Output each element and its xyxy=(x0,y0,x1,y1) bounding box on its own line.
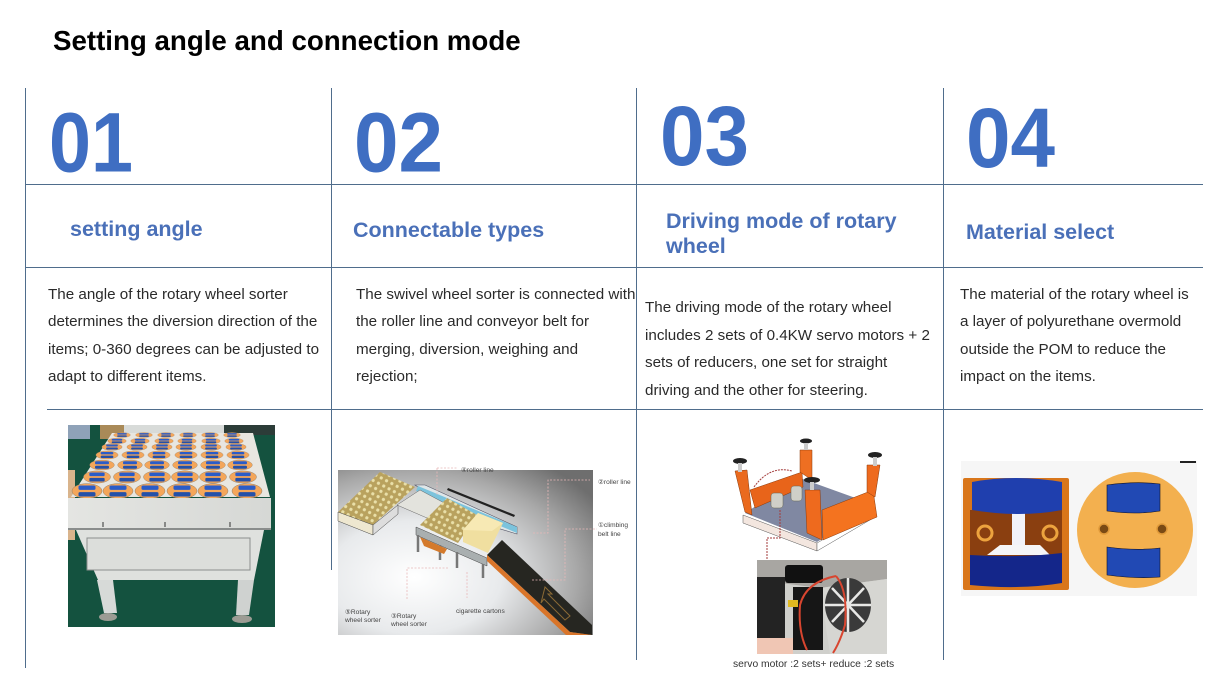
left sorter xyxy=(338,472,415,525)
front roller xyxy=(416,527,487,566)
text block: material description: The material of the rotary wheel is xyxy=(960,286,1189,303)
text block: material description: outside the POM to reduce the xyxy=(960,341,1166,358)
heading: driving mode of rotary wheel: wheel xyxy=(665,234,726,258)
number 01: 01 xyxy=(49,96,133,190)
panel: 02 connectable types xyxy=(338,96,635,635)
text block: connectable types description: The swivel wheel sorter is connected with xyxy=(356,286,635,303)
text block: driving mode description: driving and the other for steering. xyxy=(645,382,868,399)
text block: connectable types description: rejection; xyxy=(356,368,418,385)
text block: driving mode description: sets of reducers, one set for straight xyxy=(645,354,888,371)
image: conveyor layout diagram: wheel sorter xyxy=(390,621,428,628)
heading: setting angle: setting angle xyxy=(70,217,203,241)
image: drive frame and servo motor photo xyxy=(733,438,894,670)
panel: 03 driving mode xyxy=(645,89,930,670)
title: Setting angle and connection mode xyxy=(53,25,521,56)
image: conveyor layout diagram: ①climbing xyxy=(598,521,628,529)
belt xyxy=(487,540,592,635)
text block: setting angle description: determines the diversion direction of the xyxy=(48,313,317,330)
image: rotary wheel parts xyxy=(961,461,1197,596)
base plate xyxy=(745,478,875,542)
text block: connectable types description: merging, diversion, weighing and xyxy=(356,341,578,358)
feet xyxy=(733,458,747,464)
heading: material select: Material select xyxy=(966,220,1114,244)
number 02: 02 xyxy=(354,96,443,190)
callout labels: ④roller line xyxy=(461,466,494,474)
heading: connectable types: Connectable types xyxy=(353,218,544,242)
image: conveyor layout diagram xyxy=(338,466,631,635)
text block: setting angle description: adapt to different items. xyxy=(48,368,206,385)
photo caption: servo motor :2 sets+ reduce :2 sets xyxy=(733,659,894,670)
motors xyxy=(771,493,783,508)
text block: setting angle description: The angle of the rotary wheel sorter xyxy=(48,286,288,303)
carton xyxy=(463,513,503,553)
table top xyxy=(71,433,270,497)
number 03: 03 xyxy=(660,89,749,183)
image: conveyor layout diagram: ⑤Rotary xyxy=(345,608,371,616)
panel: 01 setting angle xyxy=(48,96,319,627)
assembled wheel xyxy=(1077,472,1193,588)
image: conveyor layout diagram: wheel sorter xyxy=(344,617,382,624)
text block: connectable types description: the roller line and conveyor belt for xyxy=(356,313,589,330)
text block: driving mode description: The driving mode of the rotary wheel xyxy=(645,299,892,316)
image: conveyor layout diagram: ③Rotary xyxy=(391,612,417,620)
panel: 04 material select xyxy=(960,91,1197,596)
dotted leaders xyxy=(407,468,597,600)
text block: material description: a layer of polyurethane overmold xyxy=(960,313,1181,330)
table front xyxy=(68,498,271,529)
image: rotary wheel sorter table xyxy=(68,425,275,627)
number 04: 04 xyxy=(966,91,1055,185)
text block: setting angle description: items; 0-360 degrees can be adjusted to xyxy=(48,341,319,358)
heading: driving mode of rotary wheel: Driving mode of rotary xyxy=(666,209,897,233)
text block: material description: impact on the items. xyxy=(960,368,1096,385)
motor photo xyxy=(757,560,887,654)
text block: driving mode description: includes 2 sets of 0.4KW servo motors + 2 xyxy=(645,327,930,344)
roller lines xyxy=(415,485,517,534)
open housing xyxy=(963,478,1069,590)
right sorter xyxy=(420,498,477,543)
orange frame xyxy=(735,470,752,515)
image: conveyor layout diagram: cigarette cartons xyxy=(456,608,505,615)
image: conveyor layout diagram: belt line xyxy=(598,531,621,538)
image: conveyor layout diagram: ②roller line xyxy=(598,478,631,486)
